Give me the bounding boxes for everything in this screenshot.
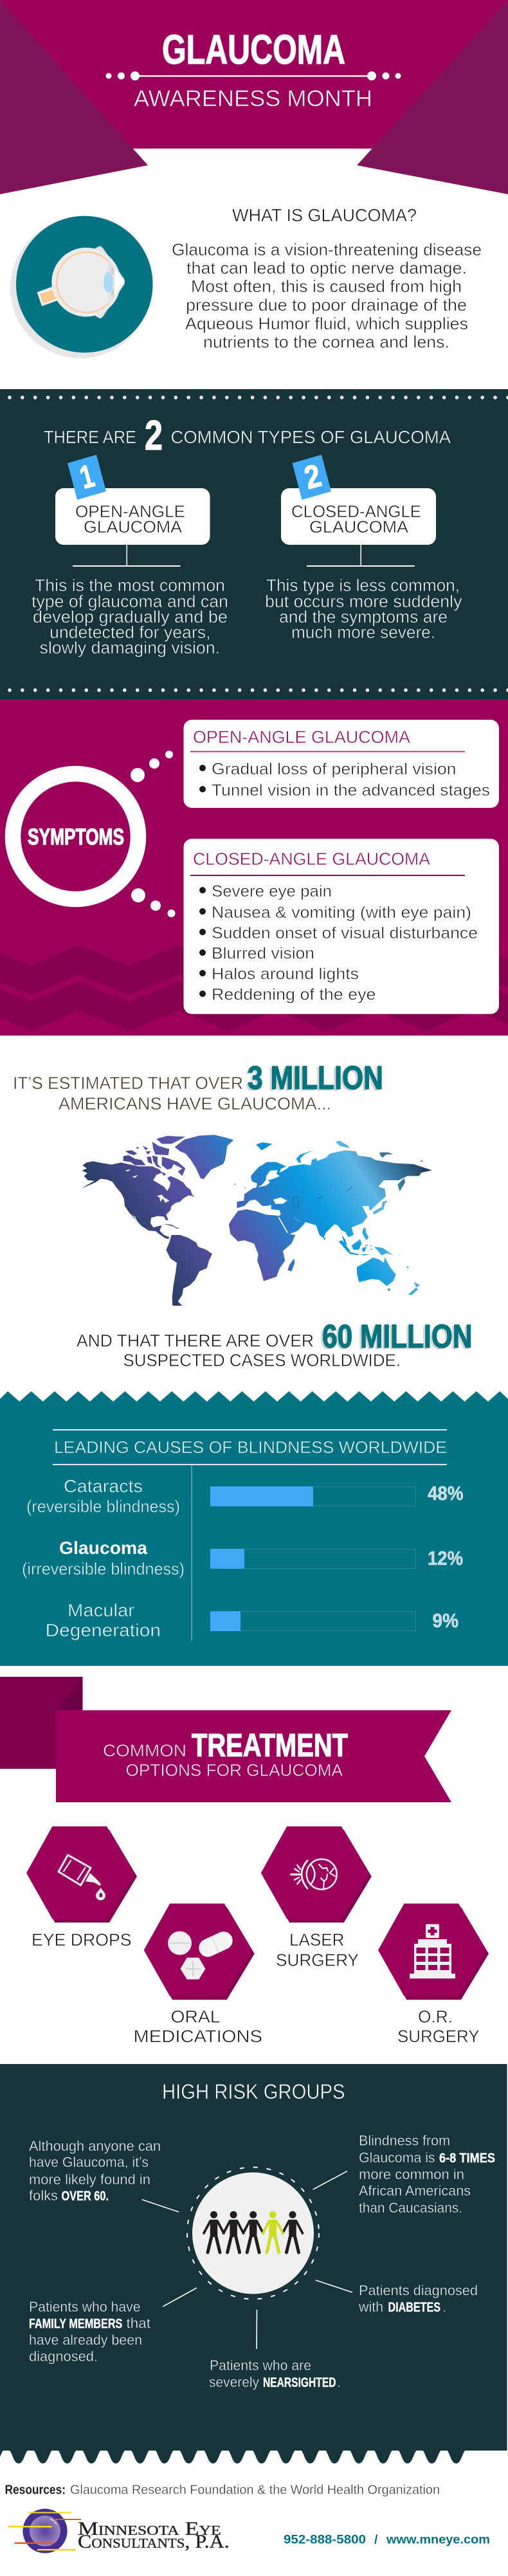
callout: 6-8 times: Blindness from bbox=[359, 2133, 450, 2148]
callout: over 60: OVER 60. bbox=[62, 2189, 109, 2204]
text: closed-angle description: This type is less common, bbox=[266, 577, 460, 595]
symptom list: Reddening of the eye bbox=[212, 985, 376, 1003]
row: glaucoma: Glaucoma bbox=[59, 1538, 147, 1558]
resources line: Glaucoma Research Foundation & the World Health Organization bbox=[70, 2483, 440, 2498]
definition text: pressure due to poor drainage of the bbox=[186, 295, 467, 315]
text: open-angle description: slowly damaging vision. bbox=[40, 639, 220, 657]
title divider bbox=[105, 71, 401, 80]
text: open-angle description: develop gradually and be bbox=[33, 608, 228, 626]
callout: 6-8 times: Glaucoma is bbox=[359, 2150, 435, 2166]
header banner bbox=[0, 0, 508, 194]
world map bbox=[82, 1135, 432, 1306]
symptom list: Gradual loss of peripheral vision bbox=[212, 760, 457, 778]
hexagon: o.r. surgery bbox=[378, 1904, 489, 2046]
south america bbox=[166, 1235, 212, 1306]
callout: over 60: have Glaucoma, it’s bbox=[29, 2154, 149, 2170]
card: open-angle symptoms bbox=[184, 720, 499, 808]
north america bbox=[82, 1161, 195, 1239]
callout: family members: diagnosed. bbox=[29, 2348, 98, 2364]
symptoms circle: SYMPTOMS bbox=[28, 825, 124, 850]
seas cut-out bbox=[254, 1170, 302, 1222]
card: open-angle bbox=[55, 455, 210, 545]
symptoms circle bbox=[13, 774, 138, 899]
panel: what is glaucoma bbox=[10, 205, 482, 358]
callout: 6-8 times: than Caucasians. bbox=[359, 2200, 462, 2216]
logo wordmark: Consultants, P.A. bbox=[78, 2532, 230, 2552]
row: glaucoma bbox=[22, 1538, 463, 1578]
card label: GLAUCOMA bbox=[84, 517, 183, 536]
callout: 6-8 times bbox=[313, 2133, 495, 2216]
card label: GLAUCOMA bbox=[309, 517, 409, 536]
row: macular degeneration: Degeneration bbox=[45, 1620, 161, 1640]
symptom list: Blurred vision bbox=[212, 944, 314, 962]
heading: common treatment options: OPTIONS FOR GLAUCOMA bbox=[126, 1760, 343, 1780]
thought bubbles bbox=[131, 751, 175, 917]
kamchatka and japan bbox=[373, 1178, 405, 1214]
callout: over 60 bbox=[29, 2138, 179, 2212]
arctic islands bbox=[234, 1140, 424, 1189]
callout: family members: that bbox=[126, 2315, 151, 2331]
madagascar bbox=[287, 1259, 295, 1272]
eurasia bbox=[237, 1150, 432, 1238]
hexagon: eye drops bbox=[26, 1827, 137, 1950]
badge: number 1 bbox=[68, 455, 106, 500]
label: laser surgery: SURGERY bbox=[276, 1951, 359, 1970]
chart heading: LEADING CAUSES OF BLINDNESS WORLDWIDE bbox=[54, 1438, 447, 1457]
badge: number 2: 2 bbox=[300, 457, 325, 496]
logo wordmark bbox=[78, 2519, 230, 2552]
definition text bbox=[172, 240, 482, 351]
title: GLAUCOMA bbox=[162, 26, 345, 73]
callout: 6-8 times: more common in bbox=[359, 2166, 464, 2182]
heading: two common types bbox=[44, 412, 451, 459]
icon: eye globe bbox=[8, 2508, 81, 2553]
card: closed-angle symptoms: CLOSED-ANGLE GLAUCOMA bbox=[193, 849, 430, 868]
icon: pills bbox=[168, 1928, 235, 1979]
card label bbox=[291, 502, 421, 536]
label: o.r. surgery: SURGERY bbox=[397, 2027, 480, 2046]
statistic: 60 million worldwide bbox=[77, 1318, 472, 1370]
row: glaucoma: (irreversible blindness) bbox=[22, 1559, 185, 1578]
symptom list: Nausea & vomiting (with eye pain) bbox=[212, 904, 471, 922]
footer logo bbox=[8, 2508, 230, 2553]
card label bbox=[75, 502, 185, 536]
callout: family members: Patients who have bbox=[29, 2299, 141, 2315]
arctic islands bbox=[123, 1136, 185, 1176]
treatment options bbox=[26, 1827, 489, 2046]
symptom list: Severe eye pain bbox=[212, 882, 332, 900]
row: macular degeneration: 9% bbox=[432, 1609, 458, 1632]
symptom list: Halos around lights bbox=[212, 965, 359, 983]
africa bbox=[229, 1209, 295, 1281]
hexagon: laser surgery bbox=[261, 1827, 372, 1970]
heading: two common types: 2 bbox=[145, 412, 163, 459]
contact details: www.mneye.com bbox=[386, 2533, 490, 2547]
text: open-angle description: This is the most common bbox=[35, 577, 225, 595]
card label: OPEN-ANGLE bbox=[75, 502, 185, 521]
heading: common treatment options: COMMON bbox=[103, 1740, 186, 1760]
card: closed-angle symptoms bbox=[184, 839, 499, 1014]
label: laser surgery bbox=[276, 1930, 359, 1970]
panel: high risk groups bbox=[0, 2064, 508, 2466]
callout: family members: have already been bbox=[29, 2332, 142, 2348]
greenland bbox=[175, 1135, 233, 1179]
symptom list: Tunnel vision in the advanced stages bbox=[212, 781, 490, 799]
callout: nearsighted: severely bbox=[209, 2374, 260, 2390]
callout: diabetes bbox=[316, 2280, 478, 2315]
text: closed-angle description: much more severe. bbox=[291, 624, 435, 642]
statistic: 3 million americans: AMERICANS HAVE GLAUCOMA... bbox=[59, 1094, 331, 1113]
text: open-angle description: undetected for years, bbox=[50, 624, 211, 642]
text: open-angle description bbox=[32, 577, 228, 657]
callout: nearsighted: NEARSIGHTED bbox=[263, 2375, 336, 2390]
label: o.r. surgery: O.R. bbox=[418, 2007, 453, 2026]
callout: over 60: Although anyone can bbox=[29, 2138, 161, 2154]
label: oral medications: MEDICATIONS bbox=[134, 2027, 262, 2046]
definition text: Aqueous Humor fluid, which supplies bbox=[185, 314, 468, 333]
heading: two common types: THERE ARE bbox=[44, 427, 136, 447]
callout: nearsighted: Patients who are bbox=[210, 2357, 311, 2373]
card label: CLOSED-ANGLE bbox=[291, 502, 421, 521]
callout: nearsighted: . bbox=[337, 2374, 341, 2390]
heading: common treatment options: TREATMENT bbox=[192, 1728, 348, 1764]
contact details: 952-888-5800 bbox=[284, 2533, 366, 2547]
heading: high risk groups: HIGH RISK GROUPS bbox=[162, 2080, 345, 2103]
row: macular degeneration bbox=[45, 1600, 458, 1640]
caspian sea and lake outlines bbox=[293, 1187, 352, 1208]
text: closed-angle description bbox=[265, 577, 462, 642]
definition text: Most often, this is caused from high bbox=[191, 277, 462, 296]
australia bbox=[357, 1257, 396, 1292]
statistic: 3 million americans: IT’S ESTIMATED THAT OVER bbox=[13, 1073, 243, 1093]
callout: diabetes: . bbox=[442, 2299, 446, 2315]
row: cataracts bbox=[26, 1476, 463, 1516]
callout: nearsighted bbox=[209, 2310, 341, 2390]
contact details: / bbox=[374, 2533, 378, 2547]
row: cataracts: (reversible blindness) bbox=[26, 1497, 180, 1516]
caribbean bbox=[163, 1224, 181, 1229]
callout: over 60: more likely found in bbox=[29, 2171, 150, 2188]
heading: what is glaucoma: WHAT IS GLAUCOMA? bbox=[232, 205, 417, 225]
contact details bbox=[284, 2533, 490, 2547]
symptom list bbox=[199, 882, 478, 1003]
people circle bbox=[187, 2168, 319, 2299]
connector: open-angle bbox=[73, 545, 180, 567]
row: cataracts: Cataracts bbox=[64, 1476, 143, 1496]
panel: leading causes of blindness bbox=[0, 1391, 508, 1666]
badge: number 2 bbox=[292, 455, 331, 500]
heading: two common types: COMMON TYPES OF GLAUCOMA bbox=[171, 427, 451, 447]
great lakes cut-out bbox=[125, 1169, 169, 1223]
southeast asia islands bbox=[323, 1227, 401, 1256]
icon: laser on retina bbox=[290, 1859, 337, 1890]
definition text: nutrients to the cornea and lens. bbox=[203, 332, 449, 351]
callout: over 60: folks bbox=[29, 2188, 58, 2204]
text: closed-angle description: and the symptoms are bbox=[279, 608, 448, 626]
label: laser surgery: LASER bbox=[289, 1930, 345, 1950]
text: open-angle description: type of glaucoma and can bbox=[32, 593, 228, 611]
connector: closed-angle bbox=[307, 545, 415, 567]
statistic: 60 million worldwide: 60 MILLION bbox=[322, 1318, 472, 1355]
icon: row of people bbox=[204, 2211, 302, 2252]
definition text: that can lead to optic nerve damage. bbox=[186, 259, 467, 278]
icon: dropper bottle bbox=[59, 1855, 105, 1900]
panel: symptoms bbox=[0, 699, 508, 1036]
row: glaucoma: 12% bbox=[428, 1547, 463, 1569]
statistic: 60 million worldwide: AND THAT THERE ARE OVER bbox=[77, 1331, 314, 1351]
text: closed-angle description: but occurs more suddenly bbox=[265, 593, 462, 611]
card: open-angle symptoms: OPEN-ANGLE GLAUCOMA bbox=[193, 727, 410, 747]
map: americas bbox=[82, 1135, 233, 1306]
row: macular degeneration: Macular bbox=[68, 1600, 134, 1620]
definition text: Glaucoma is a vision-threatening disease bbox=[172, 240, 482, 259]
callout: family members: FAMILY MEMBERS bbox=[29, 2316, 122, 2331]
label: eye drops: EYE DROPS bbox=[32, 1930, 131, 1950]
logo wordmark: Minnesota Eye bbox=[78, 2519, 221, 2539]
statistic: 3 million americans bbox=[13, 1059, 383, 1113]
label: oral medications: ORAL bbox=[171, 2007, 220, 2026]
subtitle: AWARENESS MONTH bbox=[134, 86, 372, 111]
callout: 6-8 times: African Americans bbox=[359, 2183, 471, 2199]
statistic: 60 million worldwide: SUSPECTED CASES WORLDWIDE. bbox=[123, 1351, 401, 1370]
statistic: 3 million americans: 3 MILLION bbox=[248, 1059, 383, 1096]
resources line: Resources: bbox=[5, 2483, 66, 2498]
label: oral medications bbox=[134, 2007, 262, 2046]
callout: 6-8 times: 6-8 TIMES bbox=[439, 2151, 495, 2166]
callout: diabetes: Patients diagnosed bbox=[359, 2283, 478, 2299]
symptom list: Sudden onset of visual disturbance bbox=[212, 924, 478, 942]
icon: hospital bbox=[410, 1924, 455, 1978]
callout: family members bbox=[29, 2288, 197, 2364]
hexagon: oral medications bbox=[134, 1904, 262, 2046]
callout: diabetes: DIABETES bbox=[388, 2300, 440, 2315]
badge: number 1: 1 bbox=[76, 457, 98, 496]
heading: common treatment options bbox=[103, 1728, 348, 1780]
callout: diabetes: with bbox=[358, 2299, 383, 2315]
icon: eye cross-section bbox=[10, 216, 153, 358]
treatment ribbon bbox=[0, 1677, 451, 1802]
panel: prevalence statistics bbox=[13, 1059, 472, 1370]
panel: two types of glaucoma bbox=[0, 389, 508, 699]
bar chart bbox=[22, 1465, 463, 1641]
row: cataracts: 48% bbox=[428, 1482, 463, 1504]
map: europe, africa, asia and oceania bbox=[229, 1140, 432, 1295]
symptom list bbox=[199, 760, 490, 799]
new zealand bbox=[406, 1266, 420, 1295]
card: closed-angle bbox=[281, 455, 436, 545]
label: o.r. surgery bbox=[397, 2007, 480, 2046]
